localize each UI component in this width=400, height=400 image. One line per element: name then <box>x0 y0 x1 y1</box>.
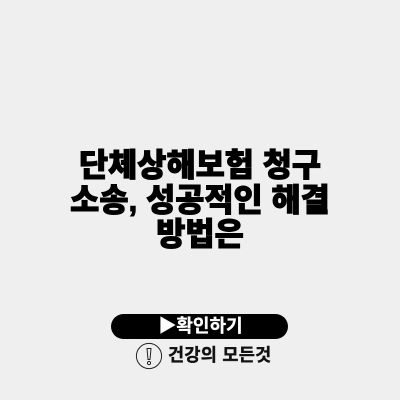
icon: exclamation circle <box>136 342 162 370</box>
title: 소송, 성공적인 해결 <box>70 182 330 218</box>
title <box>70 147 330 252</box>
button: confirm <box>111 314 288 339</box>
button label: ▶확인하기 <box>158 316 243 336</box>
title: 단체상해보험 청구 <box>79 147 321 183</box>
brand name: 건강의 모든것 <box>168 345 272 365</box>
title: 방법은 <box>156 216 244 252</box>
